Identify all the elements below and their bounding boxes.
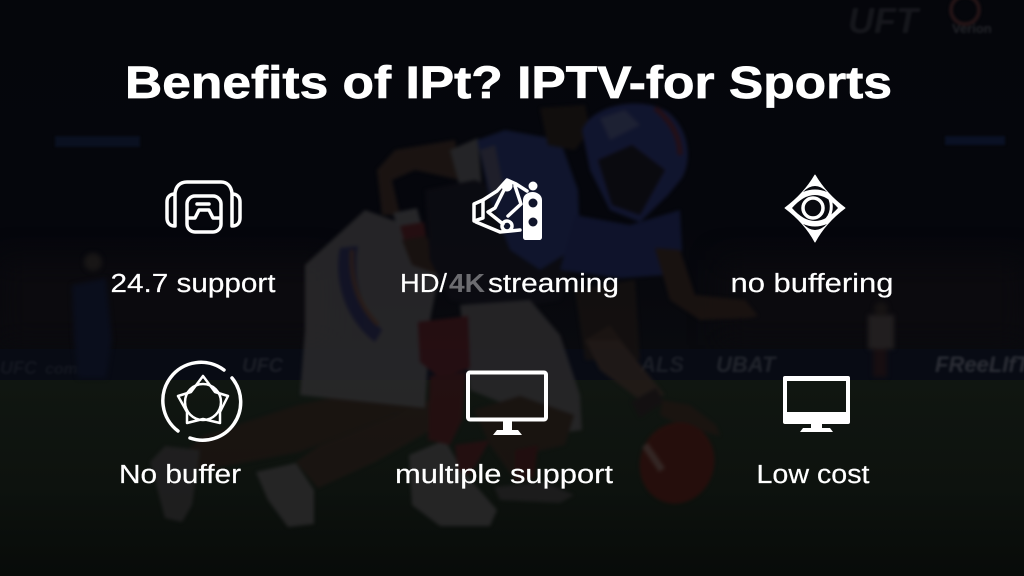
- background sponsor logo: UFT: [848, 0, 921, 41]
- icon: solid monitor: [783, 376, 850, 432]
- label: HD/4K streaming: 4K: [449, 270, 486, 298]
- crowd haze: [0, 260, 1024, 345]
- icon: headset support: [167, 182, 240, 232]
- icon: HD 4K network and remote: [474, 180, 542, 240]
- helmet: [582, 104, 688, 222]
- label: multiple support: multiple support: [395, 461, 613, 489]
- head: [540, 105, 590, 150]
- back player jersey: [477, 130, 580, 270]
- shorts stripe: [338, 246, 382, 342]
- front arm: [655, 248, 758, 320]
- back arm skin: [377, 140, 460, 215]
- background sponsor logo: [848, 0, 992, 41]
- scoreboard strips: [55, 136, 1005, 147]
- red shorts and socks: [418, 316, 470, 378]
- label: no buffering: no buffering: [730, 270, 894, 298]
- back player white shorts: [300, 210, 440, 408]
- title: Benefits of IPt? IPTV-for Sports: [125, 57, 892, 108]
- icon: diamond eye: [785, 175, 845, 242]
- centre dark body: [425, 180, 575, 310]
- stadium background photo: ALS: [639, 352, 684, 377]
- white sleeve: [450, 138, 482, 195]
- stadium background photo: UFC: [242, 355, 284, 377]
- label: Low cost: Low cost: [756, 461, 870, 489]
- stadium background photo: comfort: [45, 361, 105, 378]
- front thigh: [575, 280, 640, 360]
- players: [150, 104, 758, 527]
- wristband: [631, 388, 664, 418]
- near leg skin: [170, 380, 420, 470]
- front player jersey: [560, 210, 682, 278]
- background sponsor logo: Verion: [952, 21, 992, 36]
- label: 24.7 support: 24.7 support: [110, 270, 276, 298]
- advertising board: [0, 349, 1024, 380]
- icon: outlined monitor: [468, 372, 546, 435]
- stadium background photo: UBAT: [716, 352, 777, 377]
- cleats: [150, 446, 200, 522]
- label: HD/4K streaming: HD/: [400, 270, 448, 298]
- pitch: [0, 380, 1024, 576]
- white shorts, front: [460, 300, 582, 433]
- forearm to ball: [585, 340, 665, 400]
- hand and wristband: [393, 208, 422, 230]
- label: No buffer: No buffer: [119, 461, 242, 489]
- stadium background photo: UFC: [0, 358, 38, 378]
- label: HD/4K streaming: streaming: [488, 270, 619, 298]
- background figures: [72, 253, 894, 378]
- football: [629, 413, 725, 513]
- calf: [474, 396, 574, 480]
- icon: star in broken ring: [163, 362, 241, 440]
- label: HD/4K streaming: [400, 270, 619, 298]
